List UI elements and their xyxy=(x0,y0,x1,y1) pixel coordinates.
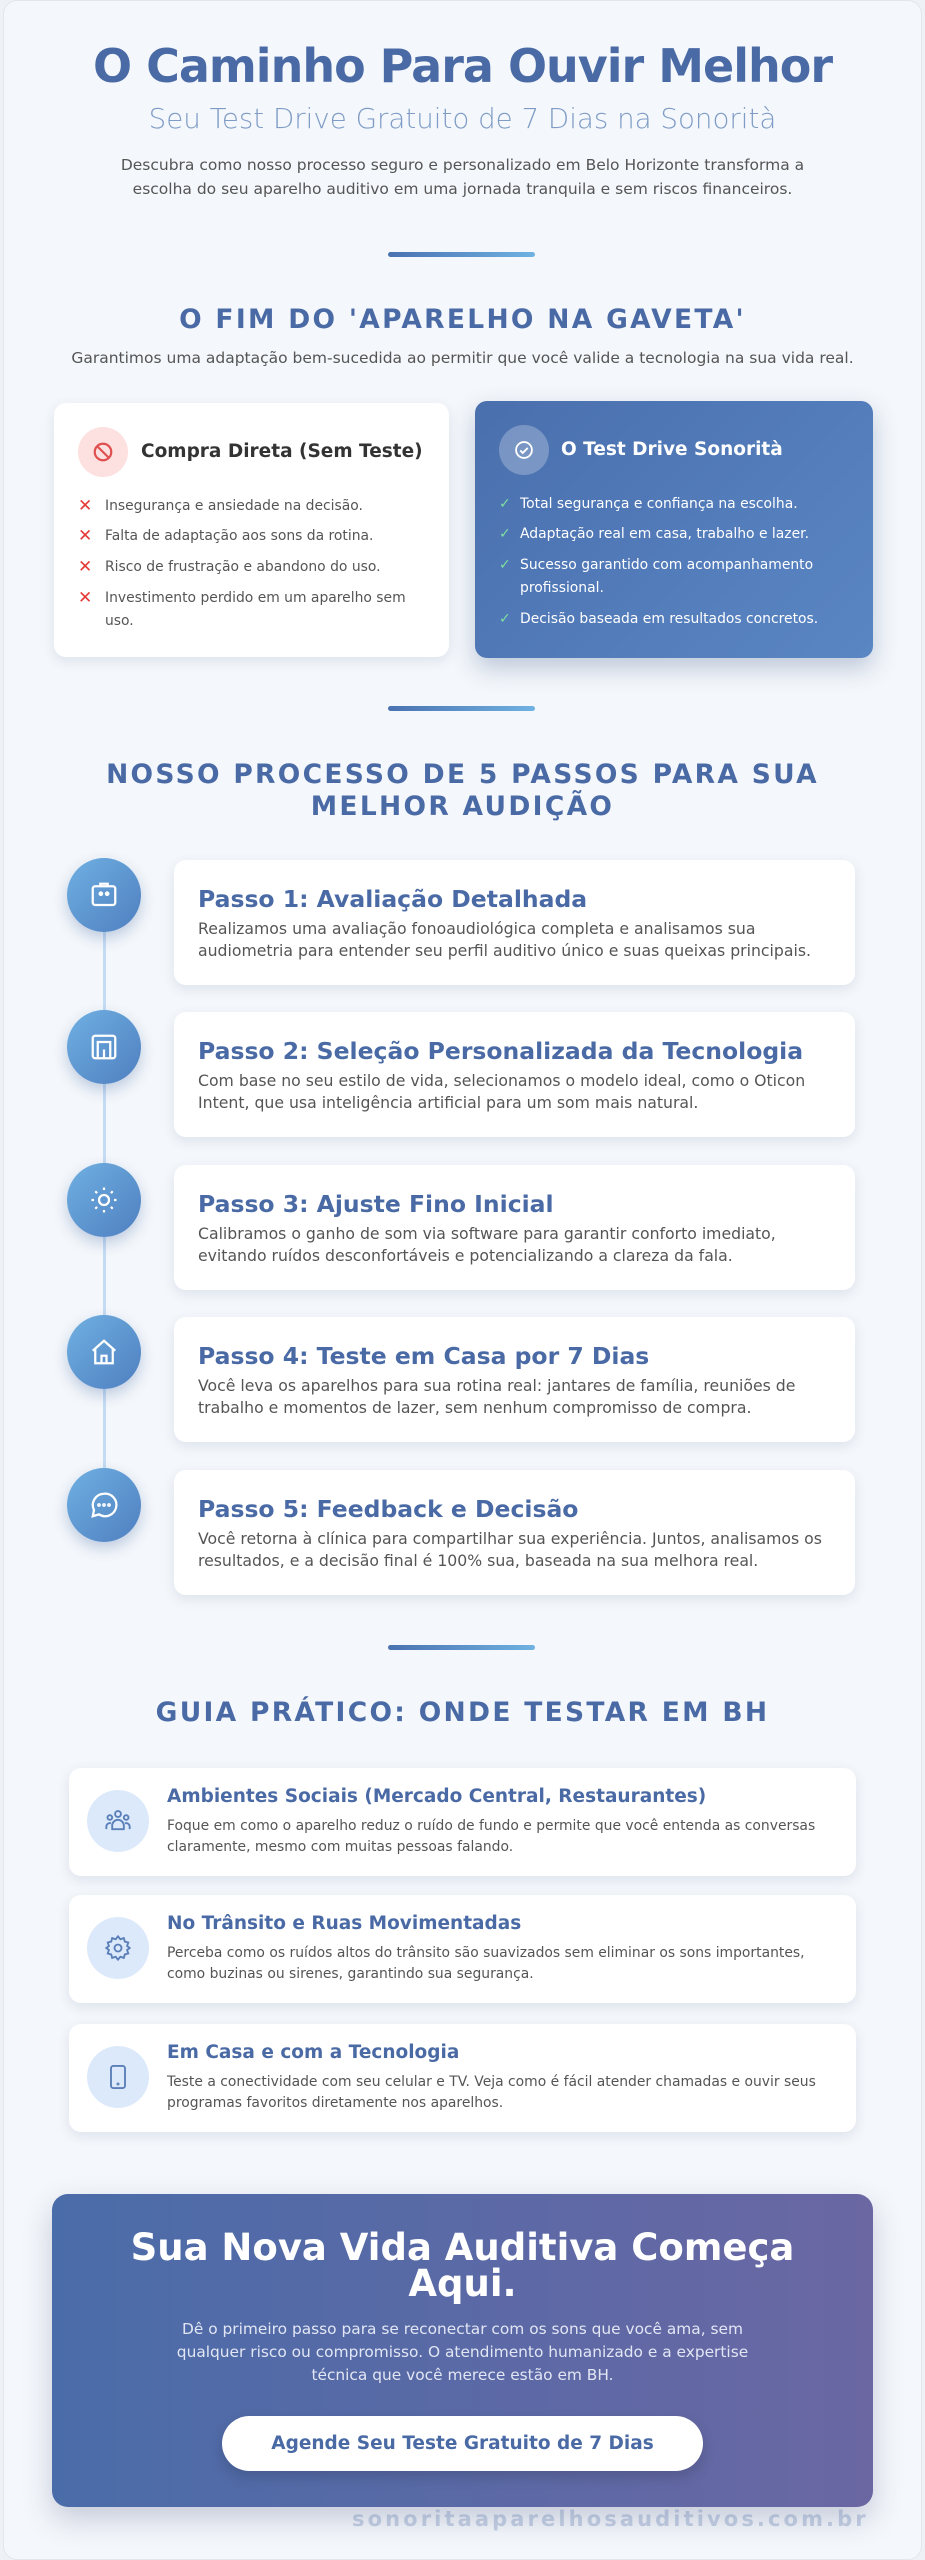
card: Passo 3: Ajuste Fino Inicial xyxy=(198,1190,554,1218)
card: Passo 1: Avaliação Detalhada xyxy=(198,885,587,913)
guide card: traffic: No Trânsito e Ruas Movimentadas xyxy=(167,1913,521,1934)
icon: people xyxy=(87,1790,149,1852)
card title: Compra Direta (Sem Teste) xyxy=(141,441,423,462)
cta text xyxy=(177,2320,748,2384)
guide card: traffic: Perceba como os ruídos altos do trânsito são suavizados sem eliminar os sons importantes, como buzinas ou sirenes, garantindo sua segurança. xyxy=(167,1945,805,1982)
guide card: social xyxy=(69,1768,856,1876)
list: ✓ xyxy=(499,496,511,512)
card xyxy=(174,1317,855,1442)
cta title: Sua Nova Vida Auditiva Começa xyxy=(131,2226,794,2269)
icon: gear xyxy=(87,1917,149,1979)
intro text: Descubra como nosso processo seguro e personalizado em Belo Horizonte transforma a xyxy=(121,156,804,174)
icon: home xyxy=(67,1315,141,1389)
icon: check xyxy=(499,425,549,475)
list: ✕ xyxy=(78,588,92,608)
list xyxy=(78,496,406,629)
cta title xyxy=(131,2226,794,2305)
card xyxy=(174,1165,855,1290)
subtitle: Seu Test Drive Gratuito de 7 Dias na Sonorità xyxy=(149,102,776,135)
cta text: técnica que você merece estão em BH. xyxy=(311,2366,614,2384)
list: ✓ xyxy=(499,526,511,542)
heading: processo: MELHOR AUDIÇÃO xyxy=(311,791,614,822)
list: Decisão baseada em resultados concretos. xyxy=(520,611,818,627)
card: Realizamos uma avaliação fonoaudiológica completa e analisamos sua audiometria para entender seu perfil auditivo único e suas queixas principais. xyxy=(198,919,811,960)
step 3 xyxy=(60,1162,858,1296)
intro text: escolha do seu aparelho auditivo em uma jornada tranquila e sem riscos financeiros. xyxy=(133,180,792,198)
list: ✓ xyxy=(499,557,511,573)
heading: processo xyxy=(106,759,819,822)
panel: test drive xyxy=(475,401,873,658)
cta title: Aqui. xyxy=(408,2262,517,2305)
card xyxy=(174,1012,855,1137)
list: ✓ xyxy=(499,611,511,627)
heading: guia pratico: GUIA PRÁTICO: ONDE TESTAR EM BH xyxy=(156,1697,769,1728)
card: Passo 2: Seleção Personalizada da Tecnologia xyxy=(198,1037,803,1065)
list: ✕ xyxy=(78,496,92,516)
step 2 xyxy=(60,1009,858,1144)
step 1 xyxy=(60,857,858,992)
cta button: Agende Seu Teste Gratuito de 7 Dias xyxy=(271,2433,654,2454)
cta text: Dê o primeiro passo para se reconectar com os sons que você ama, sem xyxy=(182,2320,743,2338)
list: Insegurança e ansiedade na decisão. xyxy=(105,498,363,514)
card: Passo 4: Teste em Casa por 7 Dias xyxy=(198,1342,649,1370)
cta text: qualquer risco ou compromisso. O atendimento humanizado e a expertise xyxy=(177,2343,748,2361)
card: Você retorna à clínica para compartilhar sua experiência. Juntos, analisamos os resultados, e a decisão final é 100% sua, baseada na sua melhora real. xyxy=(198,1529,822,1570)
card: Com base no seu estilo de vida, selecionamos o modelo ideal, como o Oticon Intent, que usa inteligência artificial para um som mais natural. xyxy=(198,1071,805,1112)
cta button xyxy=(222,2416,703,2471)
watermark: sonoritaaparelhosauditivos.com.br xyxy=(352,2507,869,2531)
icon: evaluation xyxy=(67,858,141,932)
list: Adaptação real em casa, trabalho e lazer. xyxy=(520,526,809,542)
card: Você leva os aparelhos para sua rotina real: jantares de família, reuniões de trabalho e momentos de lazer, sem nenhum compromisso de compra. xyxy=(198,1376,795,1417)
guide card: home tech: Em Casa e com a Tecnologia xyxy=(167,2042,459,2063)
icon: chat xyxy=(67,1468,141,1542)
cta panel xyxy=(52,2194,873,2507)
list: Sucesso garantido com acompanhamento profissional. xyxy=(520,557,813,596)
card xyxy=(174,860,855,985)
panel: compra direta xyxy=(54,403,449,657)
icon: selection xyxy=(67,1010,141,1084)
heading: fim da gaveta: O FIM DO 'APARELHO NA GAVETA' xyxy=(179,304,746,335)
guide card: social: Ambientes Sociais (Mercado Central, Restaurantes) xyxy=(167,1786,706,1807)
guide card: social: Foque em como o aparelho reduz o ruído de fundo e permite que você entenda as conversas claramente, mesmo com muitas pessoas falando. xyxy=(167,1818,815,1855)
list xyxy=(499,496,818,627)
card title: O Test Drive Sonorità xyxy=(561,439,783,460)
subheading: Garantimos uma adaptação bem-sucedida ao permitir que você valide a tecnologia na sua vida real. xyxy=(71,349,854,367)
guide card: home tech xyxy=(69,2024,856,2132)
step 4 xyxy=(60,1314,858,1448)
list: ✕ xyxy=(78,557,92,577)
step 5 xyxy=(60,1467,858,1602)
icon: prohibited xyxy=(78,427,128,477)
list: Investimento perdido em um aparelho sem uso. xyxy=(105,590,406,629)
heading: processo: NOSSO PROCESSO DE 5 PASSOS PARA SUA xyxy=(106,759,819,790)
card xyxy=(174,1470,855,1595)
intro text xyxy=(121,156,804,198)
icon: sun xyxy=(67,1163,141,1237)
card: Calibramos o ganho de som via software para garantir conforto imediato, evitando ruídos desconfortáveis e potencializando a clareza da fala. xyxy=(198,1224,776,1265)
timeline line xyxy=(103,900,106,1500)
title: O Caminho Para Ouvir Melhor xyxy=(93,39,832,93)
list: Total segurança e confiança na escolha. xyxy=(520,496,798,512)
icon: phone xyxy=(87,2046,149,2108)
guide card: traffic xyxy=(69,1895,856,2003)
list: ✕ xyxy=(78,526,92,546)
list: Falta de adaptação aos sons da rotina. xyxy=(105,528,373,544)
guide card: home tech: Teste a conectividade com seu celular e TV. Veja como é fácil atender chamadas e ouvir seus programas favoritos diretamente nos aparelhos. xyxy=(167,2074,816,2111)
list: Risco de frustração e abandono do uso. xyxy=(105,559,381,575)
card: Passo 5: Feedback e Decisão xyxy=(198,1495,578,1523)
